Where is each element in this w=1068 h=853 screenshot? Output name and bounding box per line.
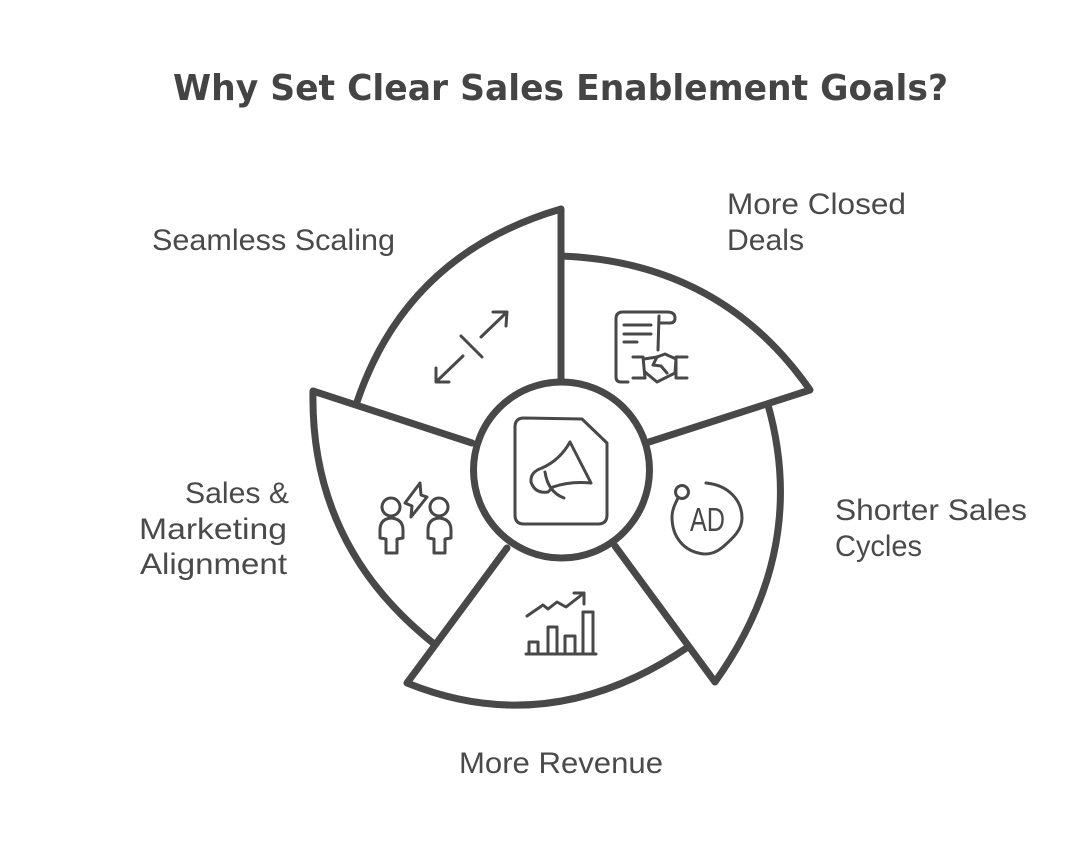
icon: megaphone document <box>515 418 607 524</box>
icon: contract and handshake <box>616 312 687 382</box>
segment: shorter sales cycles <box>615 405 780 682</box>
label: sales and marketing alignment: Marketing <box>139 513 287 546</box>
icon: AD circle: AD <box>690 501 725 538</box>
segment: sales and marketing alignment <box>313 391 472 643</box>
label: shorter sales cycles: Shorter Sales <box>835 494 1027 527</box>
label: seamless scaling: Seamless Scaling <box>152 224 395 257</box>
icon: scaling arrows <box>436 312 507 382</box>
label: shorter sales cycles: Cycles <box>835 530 922 563</box>
label: sales and marketing alignment: Sales & <box>185 477 289 510</box>
pinwheel diagram <box>313 209 810 705</box>
label: more closed deals <box>727 188 906 257</box>
icon: two people with lightning bolt <box>380 483 451 553</box>
label: sales and marketing alignment <box>139 477 289 581</box>
label: shorter sales cycles <box>835 494 1027 563</box>
segment: seamless scaling <box>357 209 561 402</box>
center ring <box>474 382 650 558</box>
segment: more closed deals <box>561 256 810 442</box>
icon: AD circle <box>672 483 742 554</box>
title: Why Set Clear Sales Enablement Goals? <box>173 68 948 109</box>
label: sales and marketing alignment: Alignment <box>140 548 288 581</box>
segment: more revenue <box>407 548 688 705</box>
icon: revenue bar chart <box>526 593 596 654</box>
label: more closed deals: More Closed <box>727 188 906 221</box>
label: more revenue: More Revenue <box>459 747 663 780</box>
label: more closed deals: Deals <box>727 224 804 257</box>
